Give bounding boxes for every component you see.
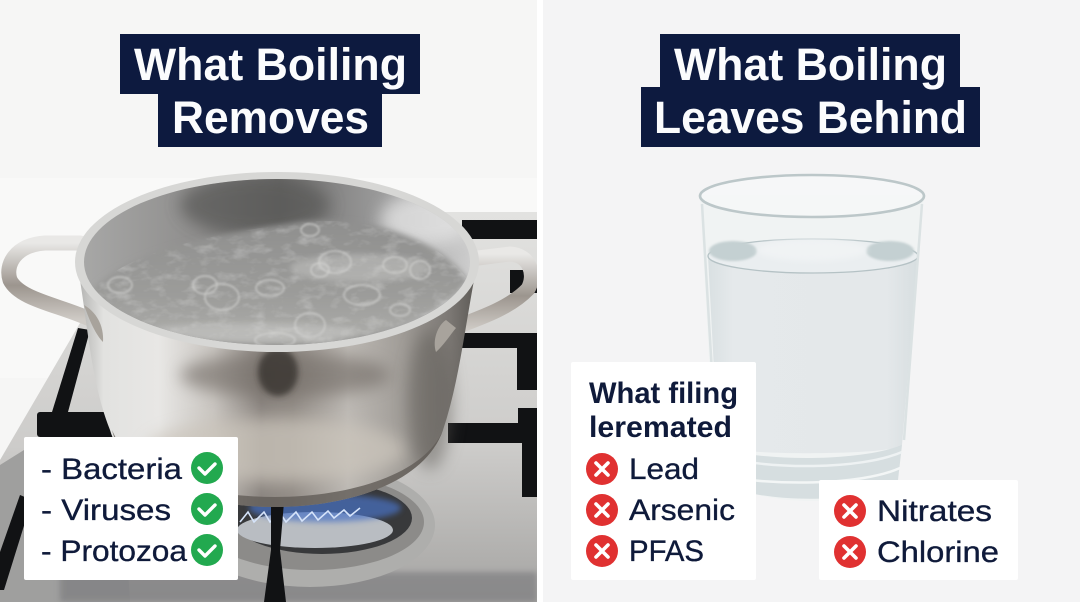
heading: What Boiling Leaves Behind: What Boiling — [674, 39, 947, 90]
item: Viruses: - Viruses — [41, 494, 171, 527]
subheading — [589, 377, 738, 444]
panel: right photo of water glass — [543, 0, 1080, 602]
icon: glass of water — [700, 175, 924, 501]
panel: left photo of boiling pot — [0, 0, 537, 602]
item: Nitrates: Nitrates — [877, 495, 992, 528]
item: Lead: Lead — [629, 453, 699, 486]
item: Bacteria: - Bacteria — [41, 453, 182, 486]
item: Viruses — [41, 493, 223, 527]
item: Chlorine: Chlorine — [877, 536, 999, 569]
stove surface — [0, 212, 537, 602]
subheading: leremated — [589, 411, 732, 444]
pot body — [80, 280, 474, 507]
gas burner and flame — [238, 480, 435, 587]
pot interior with boiling water — [84, 179, 470, 345]
panel: remaining contaminants list — [571, 362, 756, 580]
heading: What Boiling Leaves Behind — [641, 34, 980, 147]
item: Arsenic — [586, 494, 735, 527]
boiling water surface — [94, 219, 468, 345]
item: Arsenic: Arsenic — [629, 494, 735, 527]
pot handles — [9, 243, 531, 330]
handle rivets — [84, 305, 456, 352]
panel: nitrates and chlorine list — [819, 480, 1018, 580]
item: PFAS — [586, 535, 704, 568]
heading: What Boiling Removes: Removes — [172, 92, 369, 143]
heading: What Boiling Leaves Behind: Leaves Behind — [654, 92, 967, 143]
pot rim — [75, 172, 479, 352]
item: Chlorine — [834, 536, 999, 569]
pot body reflections — [112, 330, 452, 507]
heading: What Boiling Removes — [120, 34, 420, 147]
stove grates — [0, 220, 537, 590]
item: Bacteria — [41, 452, 223, 486]
item: Nitrates — [834, 495, 992, 528]
centre grate rail — [264, 506, 286, 602]
item: PFAS: PFAS — [629, 535, 704, 568]
panel: removed pathogens checklist — [24, 437, 238, 580]
heading: What Boiling Removes: What Boiling — [134, 39, 407, 90]
subheading: What filing — [589, 377, 738, 410]
item: Protozoa: - Protozoa — [41, 535, 187, 568]
item: Lead — [586, 453, 699, 486]
